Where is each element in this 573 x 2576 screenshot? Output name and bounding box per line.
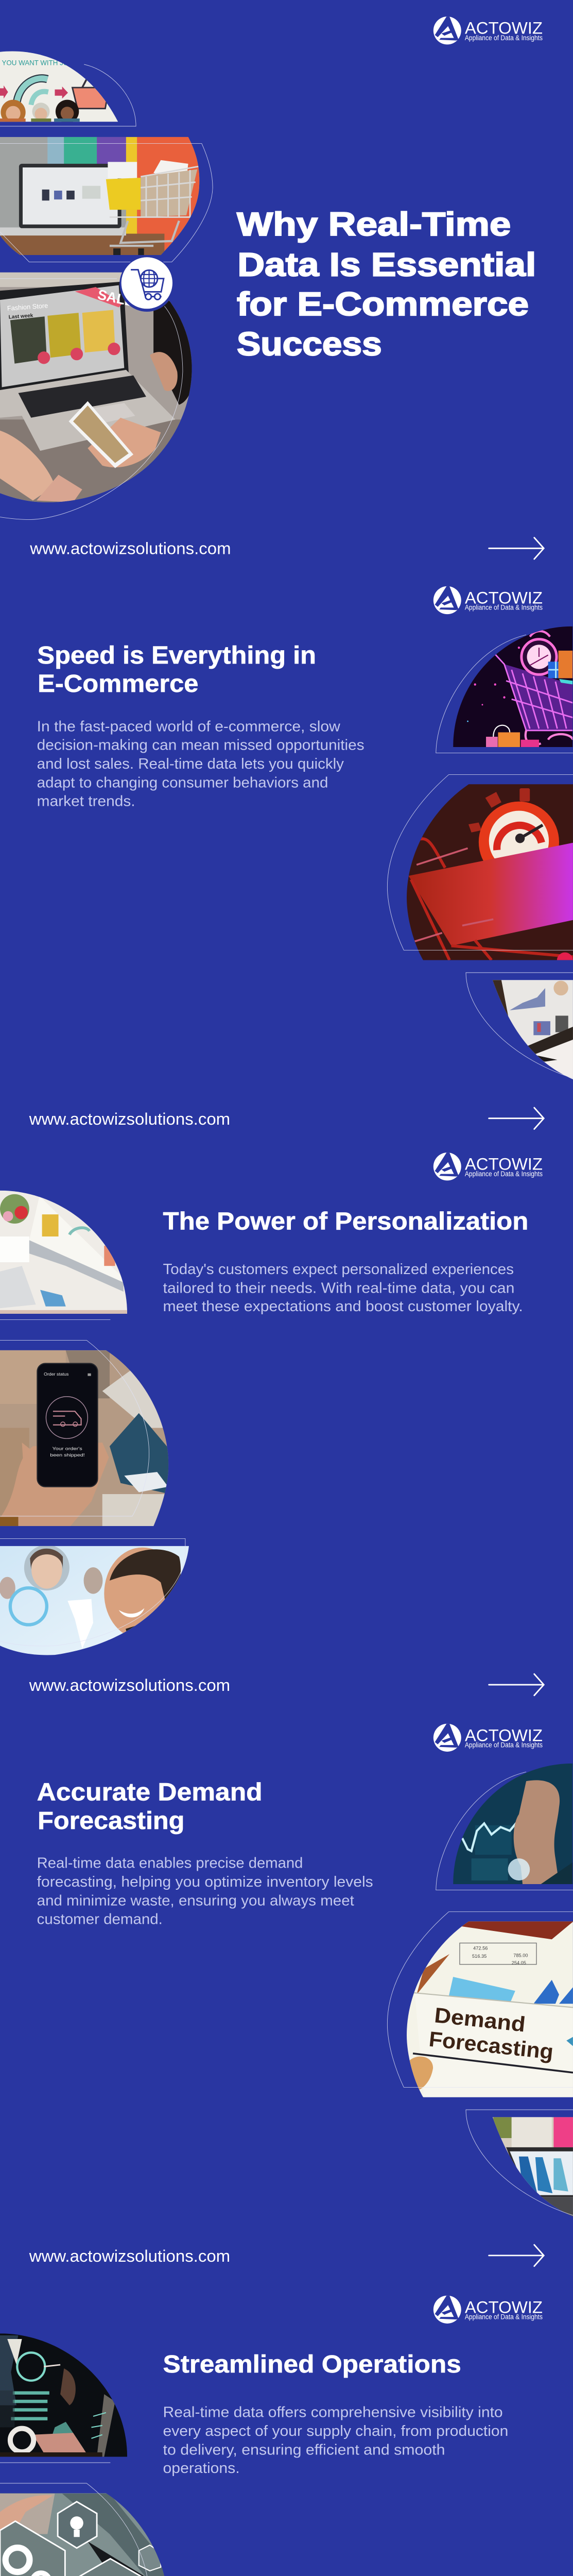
logo: ACTOWIZ: [465, 19, 543, 38]
body text: Real-time data offers comprehensive visibility into: [163, 2404, 503, 2420]
logo: [433, 1724, 543, 1752]
image frame outlines: [387, 635, 573, 1078]
body text: and lost sales. Real-time data lets you quickly: [37, 756, 344, 772]
body text: Real-time data enables precise demand: [37, 1855, 303, 1872]
image frame outlines: [0, 2463, 185, 2576]
image: analytics dashboard: [490, 979, 573, 1082]
image: online shopping illustration: YOU WANT WITH JUST O: [2, 59, 84, 66]
image: laptop with dresses: [490, 2116, 573, 2219]
image: phone with order status: been shipped!: [50, 1452, 85, 1458]
panel: demand forecasting: [29, 1724, 573, 2266]
image: neon shopping cart: [449, 625, 573, 749]
image: laptop and phone shopping: SALE: [96, 286, 135, 310]
body text: decision-making can mean missed opportunities: [37, 737, 364, 754]
image: laptop and phone shopping: [0, 273, 197, 504]
body text: [37, 718, 364, 809]
image: demand forecasting document: 785.00: [513, 1953, 528, 1958]
logo: [433, 16, 543, 44]
logo: ACTOWIZ: [465, 2297, 543, 2316]
logo: Appliance of Data & Insights: [465, 1741, 543, 1749]
title: Why Real-Time: [237, 206, 511, 243]
arrow: [489, 538, 544, 559]
logo: [433, 1153, 543, 1180]
logo: ACTOWIZ: [465, 1725, 543, 1744]
body text: forecasting, helping you optimize inventory levels: [37, 1874, 373, 1890]
logo: ACTOWIZ: [465, 1155, 543, 1174]
image: demand forecasting document: [406, 1921, 573, 2097]
image: phone with order status: Your order's: [53, 1446, 82, 1451]
image: laptop and phone shopping: Fashion Store: [7, 301, 48, 312]
image: stopwatch and cart: [406, 784, 573, 969]
title: Success: [237, 325, 382, 362]
image frame outlines: [0, 64, 213, 520]
logo: Appliance of Data & Insights: [465, 2313, 543, 2320]
image: demand forecasting document: Forecasting: [428, 2027, 554, 2064]
website url: www.actowizsolutions.com: [29, 2246, 230, 2265]
body text: adapt to changing consumer behaviors and: [37, 775, 328, 791]
image: data dashboard user: [0, 2332, 128, 2459]
image: shopping cart and laptop: [0, 137, 204, 260]
panel: streamlined operations: [0, 2296, 544, 2576]
body text: [37, 1855, 373, 1927]
logo: Appliance of Data & Insights: [465, 34, 543, 42]
logo: ACTOWIZ: [465, 588, 543, 607]
heading: The Power of Personalization: [163, 1208, 528, 1235]
image: customer support agents: [0, 1545, 190, 1657]
title: Data Is Essential: [237, 246, 536, 283]
title: for E-Commerce: [237, 285, 529, 323]
image frame outlines: [0, 1319, 185, 1646]
heading: Accurate Demand: [37, 1778, 263, 1806]
body text: [163, 2404, 508, 2477]
heading: Forecasting: [38, 1807, 184, 1835]
body text: [163, 1261, 523, 1315]
heading: Speed is Everything in: [37, 642, 316, 669]
logo: [433, 586, 543, 614]
website url: www.actowizsolutions.com: [29, 1675, 230, 1694]
image: demand forecasting document: Demand: [433, 2003, 527, 2037]
image: demand forecasting document: 516.35: [472, 1954, 487, 1959]
body text: In the fast-paced world of e-commerce, slow: [37, 718, 340, 735]
body text: tailored to their needs. With real-time data, you can: [163, 1280, 514, 1296]
logo: Appliance of Data & Insights: [465, 1170, 543, 1178]
body text: to delivery, ensuring efficient and smooth: [163, 2442, 445, 2458]
body text: and minimize waste, ensuring you always meet: [37, 1893, 354, 1909]
website url: www.actowizsolutions.com: [29, 1109, 230, 1128]
image: phone with order status: Order status: [44, 1372, 69, 1377]
image: desk with monitor: [0, 1189, 128, 1316]
heading: Streamlined Operations: [163, 2351, 461, 2378]
body text: market trends.: [37, 793, 135, 809]
body text: meet these expectations and boost customer loyalty.: [163, 1298, 523, 1315]
image: phone with order status: [0, 1349, 172, 1529]
image: demand forecasting document: 472.56: [473, 1945, 488, 1951]
website url: www.actowizsolutions.com: [29, 539, 231, 558]
arrow: [489, 1674, 544, 1696]
body text: customer demand.: [37, 1911, 163, 1927]
image frame outlines: [387, 1772, 573, 2215]
image: online shopping illustration: [0, 52, 118, 122]
image: demand forecasting document: 254.05: [512, 1960, 526, 1965]
image: laptop and phone shopping: Last week: [8, 313, 33, 320]
arrow: [489, 1108, 544, 1129]
heading: [37, 1778, 263, 1835]
arrow: [489, 2245, 544, 2266]
heading: E-Commerce: [38, 670, 198, 698]
logo: Appliance of Data & Insights: [465, 604, 543, 612]
icon: shopping cart with globe: [119, 257, 175, 312]
panel: intro: [0, 16, 544, 559]
body text: every aspect of your supply chain, from production: [163, 2423, 508, 2439]
heading: [37, 642, 316, 698]
image: hexagon gears workspace: [0, 2492, 172, 2576]
title: [237, 206, 536, 362]
panel: personalization: [0, 1153, 544, 1696]
panel: speed is everything: [29, 586, 573, 1129]
body text: operations.: [163, 2460, 240, 2477]
image: hand drawing chart: [449, 1762, 573, 1886]
logo: [433, 2296, 543, 2324]
body text: Today's customers expect personalized experiences: [163, 1261, 514, 1278]
